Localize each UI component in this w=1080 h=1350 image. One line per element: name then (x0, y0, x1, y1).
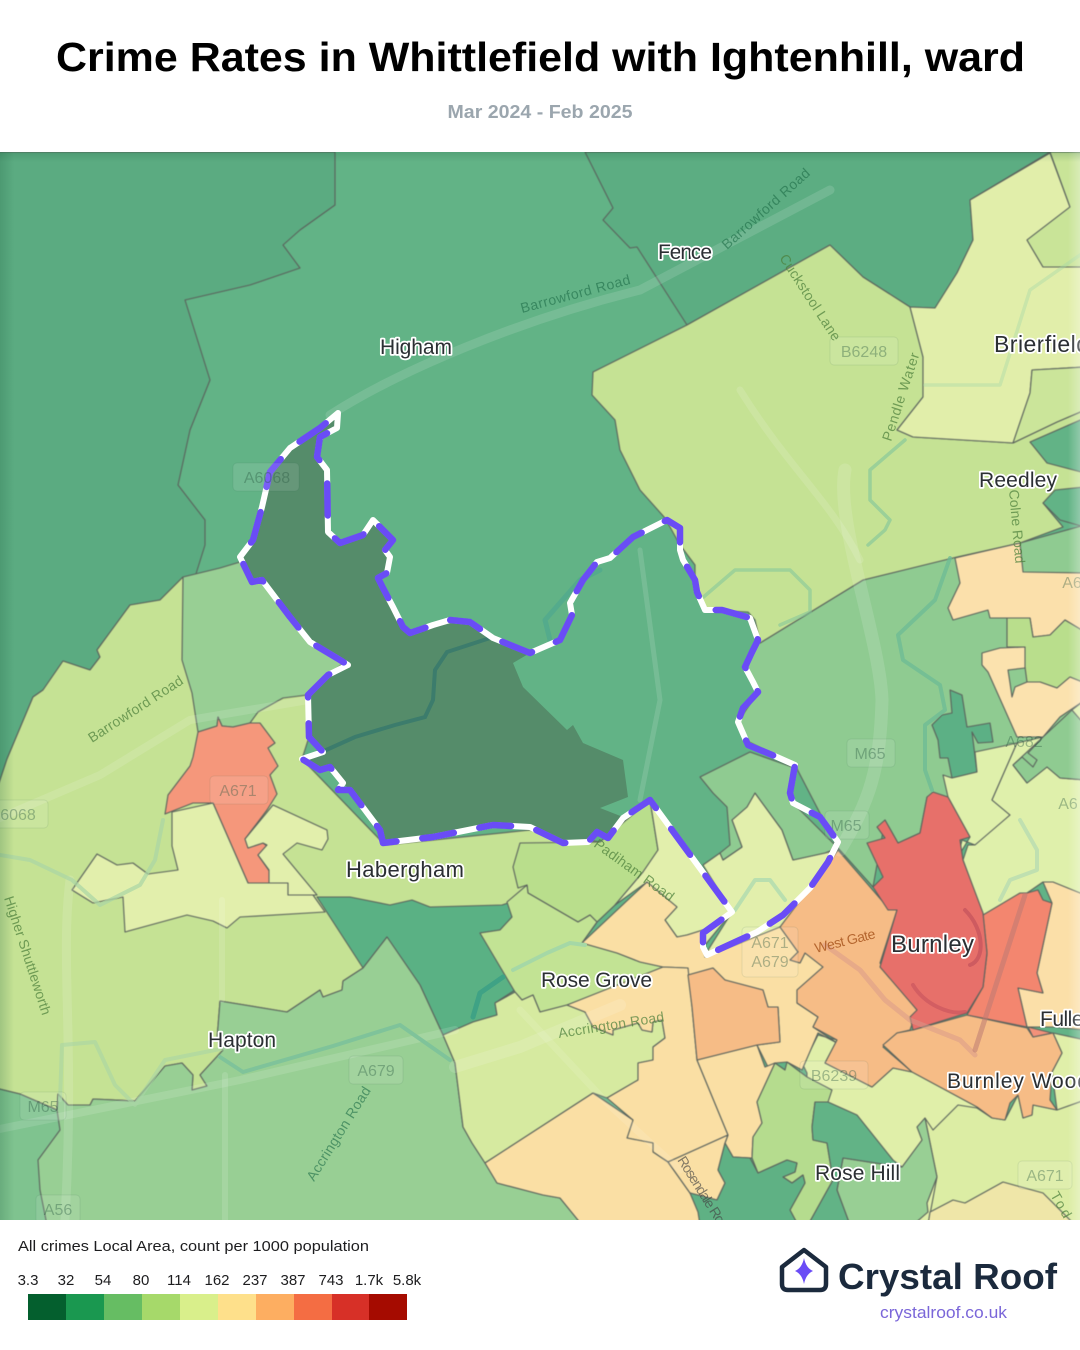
road name labels (1, 165, 1075, 1238)
region: West Gate orange (780, 850, 917, 1087)
legend tick labels: 114 (167, 1272, 191, 1289)
road network (0, 190, 882, 1220)
region: Reedley green patches (1030, 418, 1080, 527)
region: Rosendale dark green (690, 1143, 805, 1225)
map area polygons (0, 152, 1080, 1225)
road number labels: M65 (27, 1099, 59, 1116)
road name labels: Rosendale Road (674, 1153, 736, 1238)
map edge shading right (1068, 152, 1080, 1220)
road number labels: A671 (219, 783, 257, 800)
legend tick labels: 3.3 (18, 1272, 38, 1289)
region: Accrington pale (443, 992, 665, 1163)
road shield: A6068 (233, 463, 299, 491)
region: east peach Fulledge (1018, 882, 1080, 1030)
legend tick labels: 80 (133, 1272, 149, 1289)
icon: house with star (782, 1250, 826, 1290)
ward: dark crime-rate shape (240, 413, 628, 843)
road name labels: Colne Road (1006, 489, 1028, 564)
legend tick labels: 32 (58, 1272, 74, 1289)
road number labels: A671 (1026, 1168, 1064, 1185)
place labels: Rose Grove (541, 969, 652, 992)
road number labels: A682 (1005, 734, 1043, 751)
road name labels: Tod (1047, 1188, 1075, 1221)
legend tick labels: 54 (95, 1272, 111, 1289)
road name labels: Barrowford Road (519, 271, 632, 316)
map edge shading top (0, 152, 1080, 162)
map background: Higham area (0, 152, 1080, 1220)
region: Rose Hill light green (752, 1062, 833, 1225)
legend tick labels: 387 (280, 1272, 306, 1289)
road number labels: A679 (751, 954, 789, 971)
region: orange block (688, 968, 780, 1060)
region: far south-west green (0, 1088, 60, 1225)
place labels (208, 241, 1080, 1185)
road number labels: B6239 (811, 1068, 857, 1085)
logo url: crystalroof.co.uk (880, 1304, 1008, 1322)
road number labels: M65 (830, 818, 862, 835)
road number labels: B6248 (841, 344, 887, 361)
region: Barrowford light green (182, 562, 345, 732)
region: Rose Hill east light green (837, 1118, 937, 1225)
road number labels: A671 (751, 935, 789, 952)
region: small salmon ward (1028, 1027, 1052, 1037)
region: east edge pale (1072, 704, 1080, 719)
region: Brierfield pale (897, 153, 1080, 443)
region: inside ward south pale (703, 793, 838, 955)
road name labels: Accrington Road (303, 1084, 374, 1184)
region: M65 corridor light green (738, 525, 1080, 887)
road name labels: Padiham Road (591, 835, 677, 904)
region: top right yellow green (1027, 152, 1080, 267)
region: east yellow green block (1007, 618, 1080, 688)
logo wordmark: Crystal Roof (838, 1256, 1058, 1297)
region: Rose Grove green (480, 885, 663, 1012)
road name labels: Barrowford Road (718, 165, 813, 252)
region: east of Brierfield (1013, 367, 1080, 443)
region: east peach (948, 543, 1080, 637)
rivers (0, 255, 1080, 1105)
ward outline: white (240, 413, 838, 955)
map edge shading left (0, 152, 14, 1220)
road number labels: M65 (854, 746, 886, 763)
place labels: Fence (658, 241, 712, 264)
road number labels: A6 (1058, 796, 1078, 813)
place labels: Burnley (891, 931, 974, 958)
region: A671 salmon ward (165, 717, 278, 883)
region: Rosendale wedge peach (668, 1135, 728, 1200)
road name labels: Barrowford Road (85, 672, 186, 746)
legend (18, 1238, 422, 1320)
place labels: Higham (380, 336, 452, 359)
region: Padiham Road north (513, 800, 658, 922)
region: south east pale (803, 1033, 1080, 1225)
region: west dark green (0, 152, 335, 795)
legend tick labels (18, 1272, 422, 1289)
legend title: All crimes Local Area, count per 1000 population (18, 1238, 369, 1255)
region: east peach block (982, 647, 1080, 737)
place labels: Reedley (979, 469, 1058, 492)
legend tick labels: 5.8k (393, 1272, 422, 1289)
region: south east lower (925, 1100, 1080, 1212)
ward outline: purple dashes (240, 413, 838, 955)
legend tick labels: 237 (242, 1272, 268, 1289)
region: east green patch (1013, 710, 1080, 783)
region: Burnley centre red (867, 792, 987, 1030)
region: Rose Hill dark green (808, 1102, 902, 1225)
region: lower peach block east (697, 1045, 775, 1158)
region: Burnley Wood orange (883, 1015, 1062, 1120)
road number labels: A56 (44, 1202, 72, 1219)
road name labels: West Gate (813, 925, 877, 956)
region: north dark green (585, 152, 1050, 325)
title: Crime Rates in Whittlefield with Ightenhill, ward (56, 34, 1025, 80)
region: Padiham Road pale (615, 800, 732, 945)
road number labels (0, 344, 1080, 1219)
legend tick labels: 162 (204, 1272, 230, 1289)
legend colour scale (28, 1294, 407, 1320)
place labels: Habergham (346, 857, 464, 882)
legend tick labels: 1.7k (355, 1272, 384, 1289)
region: south-west light green (0, 937, 582, 1225)
road number labels: 6068 (0, 807, 36, 824)
region: east pale lower (963, 737, 1080, 915)
road name labels: Cuckstool Lane (776, 251, 844, 344)
place labels: Rose Hill (815, 1162, 900, 1185)
road shields (0, 337, 1072, 1223)
region: north-east yellow green (592, 245, 1080, 643)
region: small dark green ward (932, 690, 993, 778)
region: western yellow green (0, 577, 658, 1110)
legend tick labels: 743 (318, 1272, 344, 1289)
region: Rosendale peach (485, 1093, 710, 1225)
region: Padiham pale west (72, 803, 325, 932)
region: east pale A682 (943, 743, 1017, 857)
ward river (304, 638, 490, 760)
place labels: Hapton (208, 1029, 276, 1052)
region: bottom right warm (928, 1180, 1072, 1220)
logo: Crystal Roof (782, 1250, 1058, 1322)
road name labels: Accrington Road (557, 1008, 665, 1041)
region: inside ward light green (700, 752, 838, 860)
region: east salmon ward (967, 890, 1052, 1027)
subtitle: date range: Mar 2024 - Feb 2025 (448, 101, 632, 122)
road shield: A6068: A6068 (244, 470, 290, 487)
region: lower peach block (567, 967, 728, 1162)
road number labels: A679 (357, 1063, 395, 1080)
region: Padiham pale east (245, 805, 328, 895)
road name labels: Higher Shuttleworth (1, 894, 55, 1017)
road name labels: Pendle Water (879, 350, 922, 443)
region: central peach (582, 882, 837, 1070)
region: Habergham south dark green (317, 897, 515, 1035)
